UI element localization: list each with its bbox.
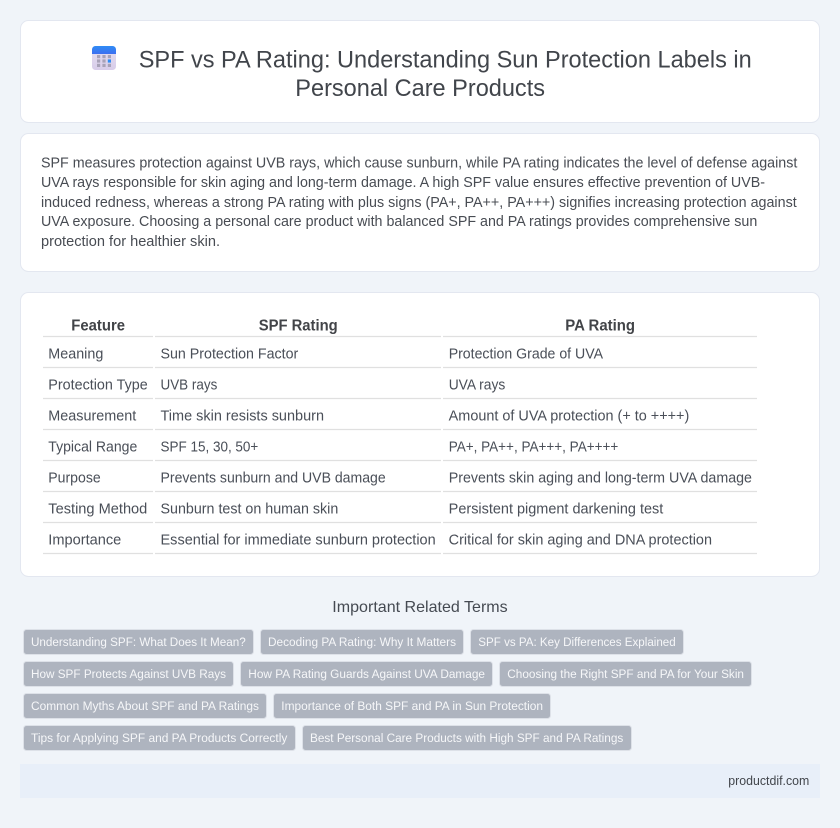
row: purpose: Prevents skin aging and long-term UVA damage [449, 470, 752, 486]
table header row: PA Rating [565, 318, 635, 335]
title: Personal Care Products [295, 75, 545, 102]
row: importance: Essential for immediate sunburn protection [160, 532, 436, 548]
row: importance: Critical for skin aging and DNA protection [449, 532, 712, 548]
summary paragraph: UVA rays responsible for skin aging and long-term damage. A high SPF value ensures effective prevention of UVB- [41, 175, 765, 191]
row: meaning [48, 346, 603, 362]
title: SPF vs PA Rating: Understanding Sun Protection Labels in [139, 46, 752, 73]
row: protection type: UVB rays [160, 377, 217, 393]
summary paragraph [41, 156, 797, 250]
row: testing method: Persistent pigment darkening test [449, 501, 663, 517]
row: typical range: SPF 15, 30, 50+ [160, 439, 258, 455]
tag: how SPF protects [24, 662, 234, 686]
tag: choosing SPF and PA: Choosing the Right SPF and PA for Your Skin [507, 667, 744, 681]
panel: header [20, 20, 820, 122]
row: meaning: Meaning [48, 346, 103, 362]
tag: importance of both [274, 694, 550, 718]
row: purpose: Prevents sunburn and UVB damage [160, 470, 386, 486]
row: typical range [48, 439, 618, 455]
tag: understanding SPF: Understanding SPF: What Does It Mean? [31, 635, 246, 649]
tag: tips for applying [24, 726, 296, 750]
tag: common myths [24, 694, 266, 718]
tag: common myths: Common Myths About SPF and PA Ratings [31, 699, 259, 713]
row: testing method [48, 501, 663, 517]
summary paragraph: SPF measures protection against UVB rays, which cause sunburn, while PA rating indicates the level of defense against [41, 156, 797, 172]
row: typical range: Typical Range [48, 439, 137, 455]
panel: related term tags [24, 630, 752, 750]
tag: how SPF protects: How SPF Protects Against UVB Rays [31, 667, 226, 681]
footer [20, 764, 820, 798]
row: measurement: Time skin resists sunburn [160, 408, 324, 424]
row: typical range: PA+, PA++, PA+++, PA++++ [449, 439, 618, 455]
row: measurement [48, 408, 689, 424]
title [139, 46, 752, 102]
row: meaning: Sun Protection Factor [160, 346, 298, 362]
table header row: Feature [71, 318, 125, 335]
row: protection type [48, 377, 505, 393]
summary paragraph: protection for healthier skin. [41, 234, 220, 250]
row: importance: Importance [48, 532, 121, 548]
row: meaning: Protection Grade of UVA [449, 346, 603, 362]
tag: understanding SPF [24, 630, 254, 654]
table header row [71, 318, 635, 335]
tag: how PA guards [240, 662, 492, 686]
tag: SPF vs PA differences [470, 630, 684, 654]
row: protection type: UVA rays [449, 377, 505, 393]
panel: comparison table [20, 292, 820, 576]
icon: calendar [92, 46, 116, 70]
tag: best products: Best Personal Care Products with High SPF and PA Ratings [310, 731, 623, 745]
row: testing method: Testing Method [48, 501, 147, 517]
row: measurement: Amount of UVA protection (+ to ++++) [449, 408, 689, 424]
panel: summary [20, 134, 820, 272]
tag: best products [302, 726, 632, 750]
heading: important related terms: Important Related Terms [332, 599, 508, 616]
row: purpose: Purpose [48, 470, 101, 486]
tag: decoding PA rating [260, 630, 464, 654]
row: purpose [48, 470, 752, 486]
table header row: SPF Rating [259, 318, 338, 335]
summary paragraph: UVA exposure. Choosing a personal care product with balanced SPF and PA ratings provides comprehensive sun [41, 214, 757, 230]
row: importance [48, 532, 712, 548]
tag: SPF vs PA differences: SPF vs PA: Key Differences Explained [478, 635, 676, 649]
tag: tips for applying: Tips for Applying SPF and PA Products Correctly [31, 731, 288, 745]
tag: how PA guards: How PA Rating Guards Against UVA Damage [248, 667, 485, 681]
row: testing method: Sunburn test on human skin [160, 501, 338, 517]
footer: productdif.com [728, 773, 809, 788]
tag: importance of both: Importance of Both SPF and PA in Sun Protection [281, 699, 543, 713]
tag: decoding PA rating: Decoding PA Rating: Why It Matters [268, 635, 456, 649]
row: protection type: Protection Type [48, 377, 148, 393]
row: measurement: Measurement [48, 408, 136, 424]
tag: choosing SPF and PA [500, 662, 752, 686]
summary paragraph: induced redness, whereas a strong PA rating with plus signs (PA+, PA++, PA+++) signifies increasing protection against [41, 195, 797, 211]
